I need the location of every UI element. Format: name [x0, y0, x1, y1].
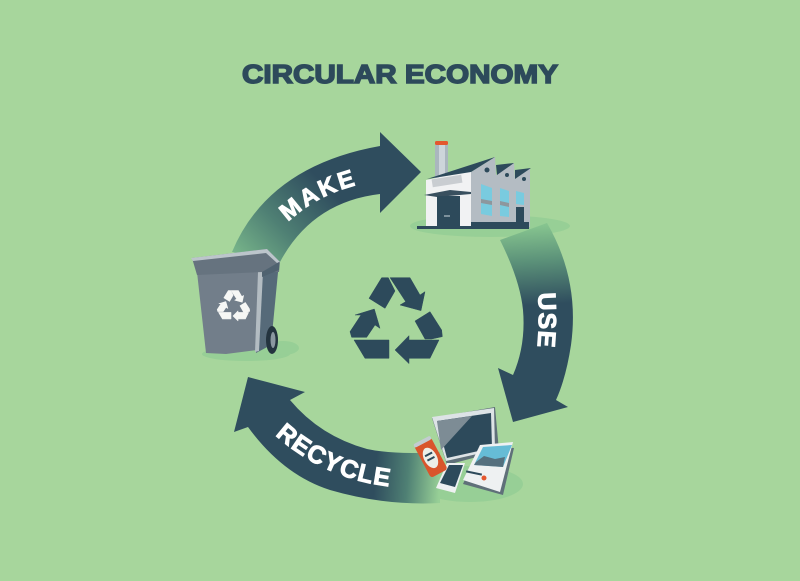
- arrow: use: [498, 223, 573, 422]
- arrow: recycle: [234, 377, 440, 504]
- factory ground shadow: [410, 215, 570, 237]
- magazine: [463, 442, 514, 495]
- icon: recycling bin: [191, 249, 299, 361]
- label: recycle: RECYCLE: [276, 422, 391, 487]
- phone: [436, 463, 465, 493]
- arrow: make: [232, 132, 421, 262]
- icon: factory: [417, 141, 531, 229]
- icon: white recycle symbol: [217, 291, 250, 321]
- title: CIRCULAR ECONOMY: [242, 59, 558, 89]
- icon: devices and can: [413, 407, 514, 495]
- can: [413, 436, 448, 478]
- monitor: [432, 407, 499, 465]
- label: use: USE: [537, 293, 557, 347]
- label: make: MAKE: [278, 169, 356, 222]
- devices ground shadow: [417, 466, 523, 502]
- icon: central recycle symbol: [350, 278, 442, 364]
